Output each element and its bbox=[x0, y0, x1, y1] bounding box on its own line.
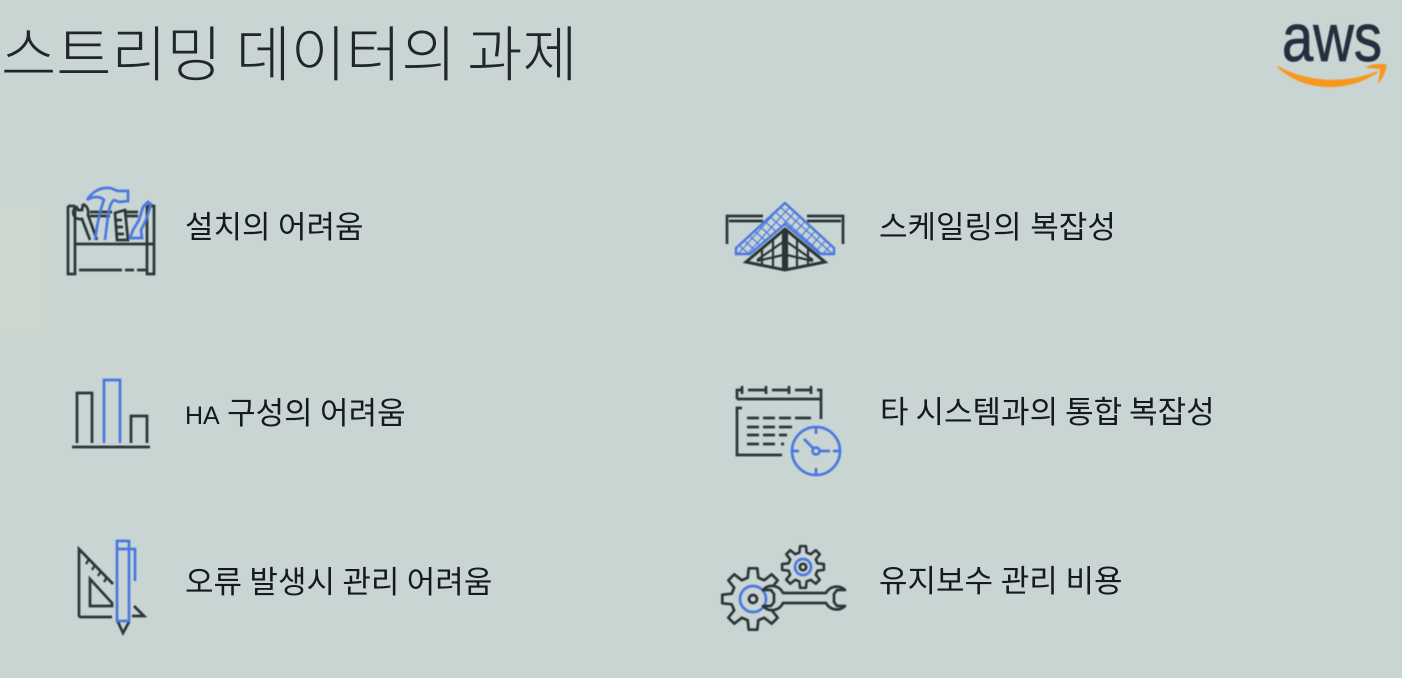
title: 스트리밍 데이터의 과제 bbox=[1, 7, 578, 94]
icon: scaling pyramid bbox=[724, 201, 846, 272]
text: maintenance cost: 유지보수 관리 비용 bbox=[879, 556, 1123, 601]
icon: bar chart bbox=[71, 378, 151, 450]
text: high availability: HA 구성의 어려움 bbox=[185, 388, 406, 433]
text: installation: 설치의 어려움 bbox=[185, 202, 364, 247]
icon: ruler and pencil bbox=[76, 538, 148, 636]
text: scaling complexity: 스케일링의 복잡성 bbox=[879, 202, 1116, 247]
logo: aws: aws bbox=[1282, 0, 1382, 76]
text: error management: 오류 발생시 관리 어려움 bbox=[185, 557, 492, 602]
icon: calendar and clock bbox=[734, 385, 842, 477]
icon: gears and wrench bbox=[720, 544, 847, 632]
icon: toolbox bbox=[66, 186, 156, 276]
text: system integration complexity: 타 시스템과의 통합 복잡성 bbox=[880, 387, 1215, 432]
